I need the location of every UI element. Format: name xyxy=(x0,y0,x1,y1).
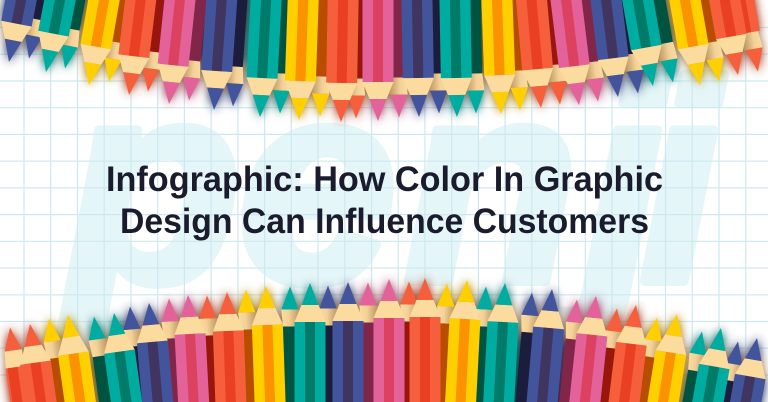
title xyxy=(106,160,663,241)
pencil pair: blue xyxy=(319,282,364,402)
title: Infographic: How Color In Graphic xyxy=(106,160,663,199)
pencil pair: pink xyxy=(548,0,607,107)
pencil pair: teal xyxy=(85,311,147,402)
pencil pair: red xyxy=(114,0,172,97)
pencil pair: yellow xyxy=(481,0,529,115)
pencil pair: yellow xyxy=(40,313,101,402)
pencil pair: yellow xyxy=(628,312,692,402)
watermark: penji logo: penji xyxy=(57,24,725,343)
pencil pair: yellow xyxy=(432,279,482,402)
pencil pair: pink xyxy=(362,0,408,121)
pencil pair: blue xyxy=(707,335,768,402)
top row of colored pencils xyxy=(0,0,767,122)
pencil pair: blue xyxy=(512,288,567,402)
pencil pair: red xyxy=(593,303,651,402)
pencil pair: yellow xyxy=(74,0,140,88)
pencil pair: red xyxy=(198,291,247,402)
pencil pair: red xyxy=(700,0,767,78)
pencil pair: blue xyxy=(587,0,647,99)
pencil pair: teal xyxy=(31,0,98,75)
pencil pair: teal xyxy=(615,0,682,89)
pencil pair: blue xyxy=(0,0,62,65)
pencil pair: red xyxy=(400,278,440,402)
pencil pair: teal xyxy=(245,0,295,118)
pencil pair: blue xyxy=(401,0,448,117)
pencil pair: pink xyxy=(359,279,404,402)
pencil pair: red xyxy=(326,0,367,122)
pencil pair: red xyxy=(514,0,569,109)
pencil pair: yellow xyxy=(662,0,728,88)
pencil pair: blue xyxy=(199,0,251,111)
pencil pair: teal xyxy=(281,283,326,402)
pencil pair: red xyxy=(0,322,63,402)
pencil pair: yellow xyxy=(284,0,333,121)
pencil pair: teal xyxy=(671,325,736,402)
pencil pair: pink xyxy=(154,0,211,106)
pencil pair: pink xyxy=(160,294,210,402)
pencil pair: pink xyxy=(555,294,611,402)
title: Design Can Influence Customers xyxy=(120,202,649,241)
pencil pair: yellow xyxy=(237,285,286,402)
pencil pair: blue xyxy=(121,302,176,402)
pencil pair: teal xyxy=(439,0,485,117)
pencil pair: teal xyxy=(471,282,520,402)
bottom row of colored pencils xyxy=(0,278,768,402)
